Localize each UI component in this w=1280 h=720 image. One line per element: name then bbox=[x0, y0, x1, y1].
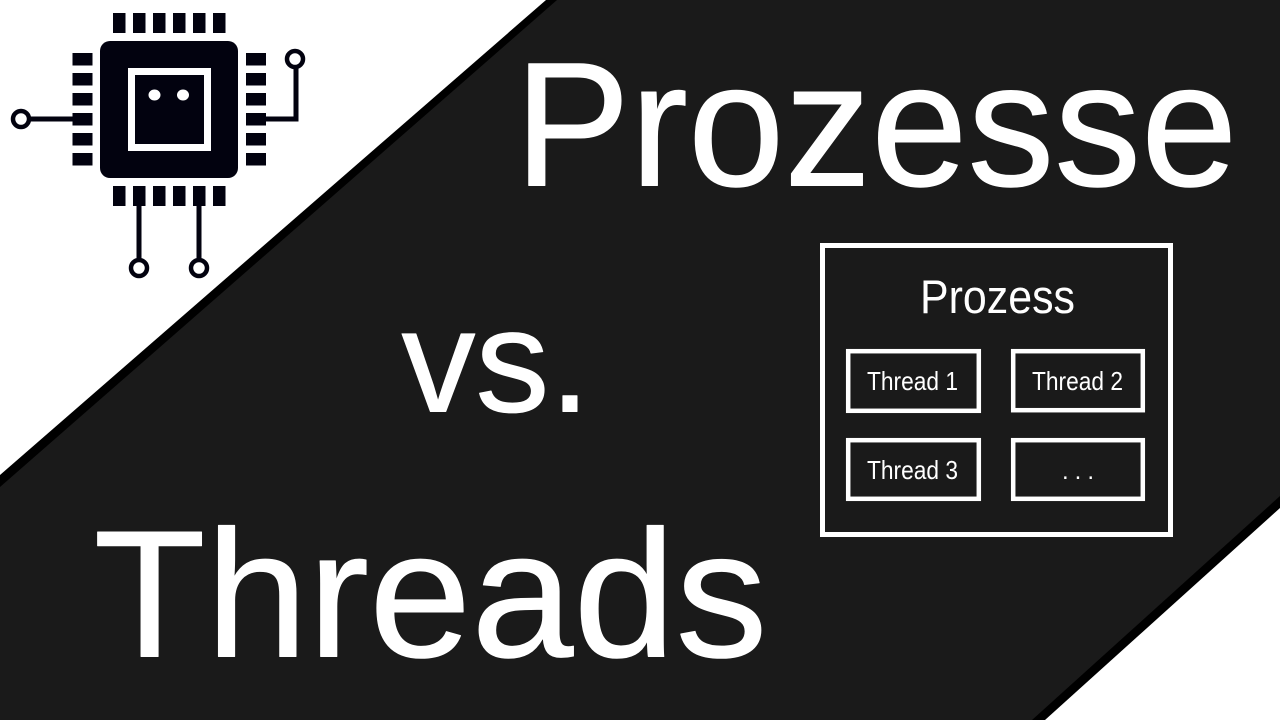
title: Prozesse: Prozesse bbox=[514, 26, 1238, 224]
heading: Prozess: Prozess bbox=[920, 270, 1075, 323]
box: Thread 2: Thread 2 bbox=[1032, 366, 1123, 396]
title: Threads: Threads bbox=[94, 494, 767, 696]
title: vs.: vs. bbox=[402, 280, 590, 444]
box: Thread 1: Thread 1 bbox=[867, 366, 958, 396]
box: Thread 3 bbox=[848, 440, 979, 499]
box: ellipsis bbox=[1013, 440, 1143, 499]
box: Thread 2 bbox=[1013, 351, 1143, 410]
box: Thread 1 bbox=[848, 351, 979, 411]
box: ellipsis: . . . bbox=[1062, 458, 1094, 485]
icon: CPU chip bbox=[13, 13, 303, 276]
panel: process diagram bbox=[822, 246, 1170, 534]
box: Thread 3: Thread 3 bbox=[867, 455, 958, 485]
